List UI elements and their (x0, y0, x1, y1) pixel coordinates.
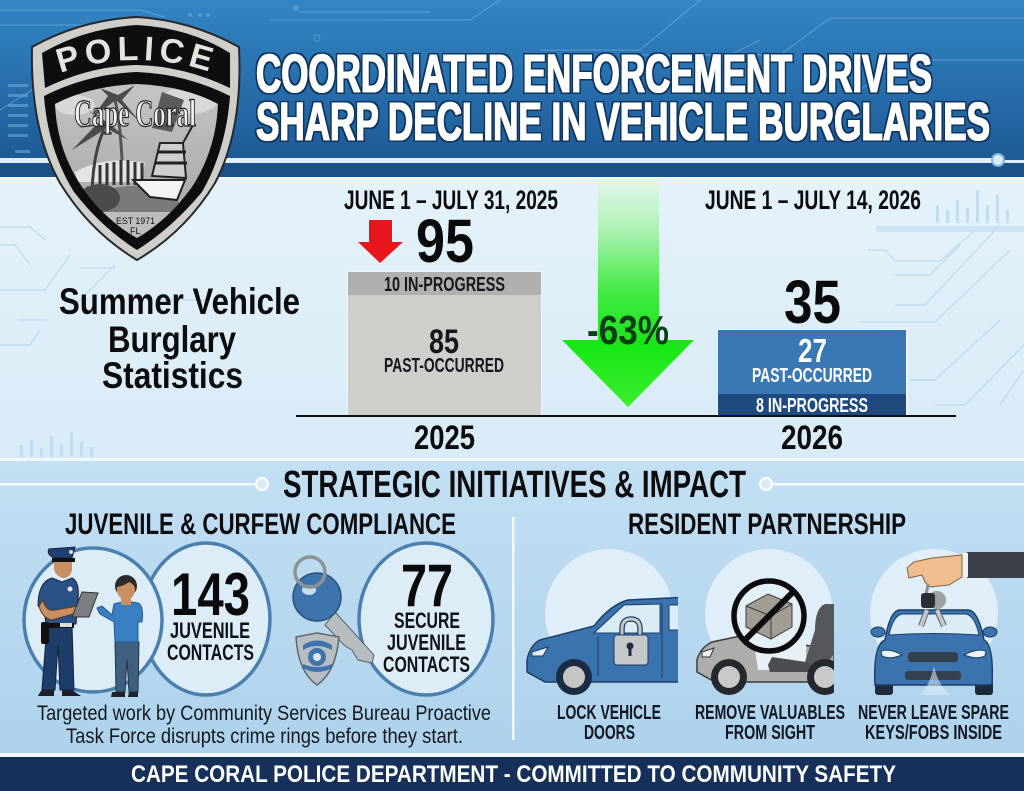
icon: officer and juvenile in circle (24, 547, 162, 697)
badge word: cape coral: Cape Coral (74, 93, 196, 135)
bar 2026 (717, 329, 908, 417)
label: DOORS (584, 722, 635, 744)
bar 2025: PAST-OCCURRED (384, 355, 504, 377)
tip: never leave spare keys (858, 549, 1024, 744)
police badge: EST 1971 (116, 216, 155, 226)
label (557, 702, 661, 744)
heading: juvenile and curfew compliance: JUVENILE & CURFEW COMPLIANCE (65, 508, 456, 541)
panel heading: summer vehicle burglary statistics: Burglary (108, 319, 236, 360)
stat circle: 77 secure juvenile contacts: 77 (401, 552, 453, 619)
icon: hand with keys (907, 552, 1024, 626)
badge word: police: POLICE (56, 36, 214, 72)
axis label 2025: 2025 (414, 419, 475, 457)
stat circle: 143 juvenile contacts: CONTACTS (167, 640, 254, 665)
title (256, 44, 990, 152)
bar 2026: PAST-OCCURRED (752, 365, 872, 387)
panel heading: summer vehicle burglary statistics: Statistics (102, 355, 243, 396)
bar 2026: 8 IN-PROGRESS (756, 395, 868, 417)
tip: remove valuables from sight (695, 549, 845, 744)
tip: lock vehicle doors (527, 549, 690, 744)
stat circle: 77 secure juvenile contacts: CONTACTS (383, 652, 470, 677)
icon: no valuables symbol (734, 581, 804, 651)
police badge (30, 16, 240, 262)
label (695, 702, 845, 744)
label: REMOVE VALUABLES (695, 702, 845, 724)
bar 2025: 10 IN-PROGRESS (384, 274, 505, 296)
panel heading: summer vehicle burglary statistics: Summer Vehicle (59, 281, 300, 322)
footer banner (0, 757, 1024, 791)
date range 2025: JUNE 1 – JULY 31, 2025 (344, 185, 558, 215)
green decrease arrow: -63% (587, 307, 669, 353)
stat circle: 143 juvenile contacts (142, 543, 270, 695)
icon: small police badge (296, 633, 339, 685)
bar 2026: 27 (798, 332, 827, 369)
panel heading: summer vehicle burglary statistics (59, 281, 300, 396)
label: FROM SIGHT (725, 722, 815, 744)
stat circle: 77 secure juvenile contacts: SECURE (394, 608, 460, 633)
description text: Targeted work by Community Services Bureau Proactive (37, 702, 491, 725)
police badge: FL (130, 226, 141, 236)
footer banner: CAPE CORAL POLICE DEPARTMENT - COMMITTED TO COMMUNITY SAFETY (131, 761, 896, 788)
description text (37, 702, 491, 748)
label: LOCK VEHICLE (557, 702, 661, 724)
icon: red down arrow (358, 220, 403, 263)
bar 2025 (347, 271, 542, 416)
stat circle: 77 secure juvenile contacts: JUVENILE (387, 630, 466, 655)
total 2026: 35 (784, 268, 841, 336)
stat circle: 143 juvenile contacts: 143 (171, 561, 250, 628)
heading: resident partnership: RESIDENT PARTNERSHIP (628, 508, 906, 541)
stat circle: 77 secure juvenile contacts (359, 543, 493, 695)
icon: key and badge (293, 557, 374, 685)
section heading: strategic initiatives and impact: STRATEGIC INITIATIVES & IMPACT (283, 464, 746, 506)
total 2025: 95 (416, 207, 474, 275)
description text: Task Force disrupts crime rings before they start. (66, 725, 463, 748)
label (858, 702, 1009, 744)
axis label 2026: 2026 (781, 419, 843, 457)
stat circle: 143 juvenile contacts: JUVENILE (170, 618, 250, 643)
green decrease arrow (562, 178, 694, 407)
bar 2025: 85 (429, 323, 459, 361)
icon: padlock (614, 619, 648, 665)
icon: car front view (871, 610, 997, 695)
date range 2026: JUNE 1 – JULY 14, 2026 (705, 185, 921, 215)
